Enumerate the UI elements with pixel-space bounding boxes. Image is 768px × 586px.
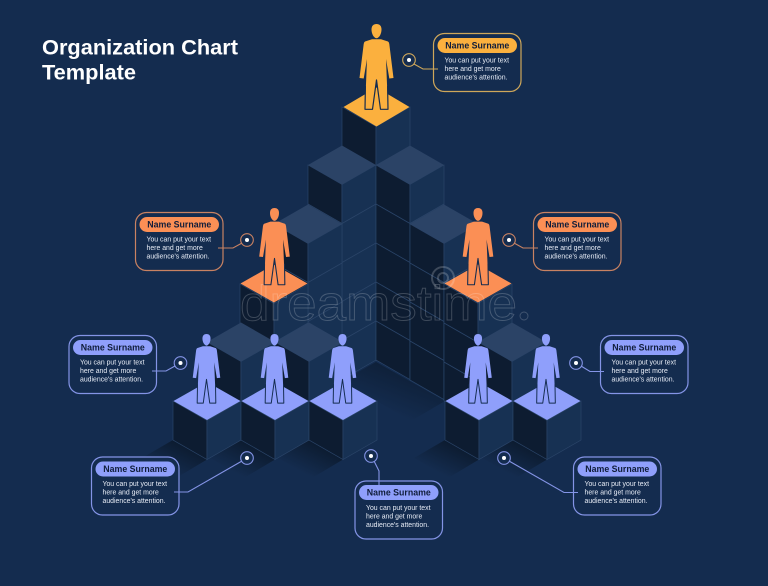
- cube 5: [513, 401, 581, 460]
- callout: blue right: [570, 336, 688, 394]
- watermark: dreamstime: [240, 277, 517, 331]
- callout: blue left: [69, 336, 187, 394]
- callout: blue middle: here and get more: [366, 514, 422, 520]
- callout: blue left: You can put your text: [80, 360, 145, 367]
- callout: orange left: [136, 212, 253, 270]
- callout: top: audience's attention.: [444, 75, 508, 82]
- person: blue 1: [193, 334, 220, 403]
- column: fourth tier right: [478, 322, 546, 440]
- person: blue 4: [464, 334, 492, 403]
- callout: blue lower left: Name Surname: [103, 464, 167, 474]
- callout: top: here and get more: [444, 66, 501, 73]
- callout: blue lower left: audience's attention.: [102, 498, 166, 505]
- callout: blue lower right: Name Surname: [585, 464, 649, 474]
- callout: blue lower right: audience's attention.: [584, 498, 648, 505]
- callout: blue right: Name Surname: [612, 342, 676, 352]
- callout: orange left: You can put your text: [146, 237, 211, 244]
- cube 3: [309, 401, 377, 460]
- callout: blue right: audience's attention.: [612, 377, 675, 384]
- callout: blue middle: You can put your text: [366, 505, 431, 512]
- callout: orange right: Name Surname: [545, 220, 609, 230]
- callout: blue lower right: You can put your text: [584, 481, 649, 488]
- callout: orange right: audience's attention.: [544, 254, 608, 261]
- column: third tier left: [274, 204, 342, 400]
- column: top: [342, 107, 410, 360]
- person: blue 5: [532, 334, 560, 403]
- floor shadows: [142, 362, 547, 478]
- column: third tier right: [410, 204, 478, 400]
- cube 2: [241, 401, 309, 460]
- callout: blue lower right: here and get more: [584, 490, 641, 497]
- callout: orange right: [503, 212, 621, 270]
- callout: blue lower right: [498, 452, 661, 515]
- callout: blue middle: audience's attention.: [366, 522, 429, 529]
- callout: blue right: You can put your text: [612, 360, 676, 367]
- callout: blue middle: [355, 450, 442, 539]
- column: second tier left: [308, 146, 376, 380]
- person: orange left: [259, 208, 290, 285]
- callout: orange left: Name Surname: [147, 220, 211, 230]
- person: blue 3: [329, 334, 356, 403]
- callout: blue middle: Name Surname: [367, 488, 431, 498]
- cube 1: [173, 401, 241, 460]
- platform tops: [174, 88, 580, 420]
- callout: blue right: here and get more: [612, 368, 668, 375]
- person: blue 2: [261, 334, 288, 403]
- callout: blue left: here and get more: [80, 368, 136, 375]
- cube 4: [445, 401, 513, 460]
- callout: orange left: here and get more: [146, 245, 203, 252]
- title: Template: [42, 62, 136, 84]
- callout: top: Name Surname: [445, 40, 509, 50]
- callout: blue left: Name Surname: [81, 342, 145, 352]
- callout: top: You can put your text: [444, 58, 509, 65]
- column: fourth tier left: [207, 322, 275, 440]
- callout: blue lower left: You can put your text: [102, 481, 167, 488]
- column: fourth tier centre: [275, 322, 343, 440]
- person: top: [360, 24, 394, 109]
- callout: blue lower left: here and get more: [102, 490, 159, 497]
- column: orange right: [444, 284, 512, 420]
- callout: top: [403, 34, 521, 92]
- callout: orange left: audience's attention.: [146, 254, 210, 261]
- callout: orange right: here and get more: [544, 245, 601, 252]
- title: [42, 36, 238, 84]
- column: orange left: [240, 284, 308, 420]
- isometric staircase of cubes: [173, 107, 581, 460]
- callout: orange right: You can put your text: [544, 237, 609, 244]
- title: Organization Chart: [42, 36, 238, 60]
- callout: blue lower left: [92, 452, 253, 515]
- person: orange right: [463, 208, 493, 285]
- column: second tier right: [376, 146, 444, 380]
- callout: blue left: audience's attention.: [80, 377, 143, 384]
